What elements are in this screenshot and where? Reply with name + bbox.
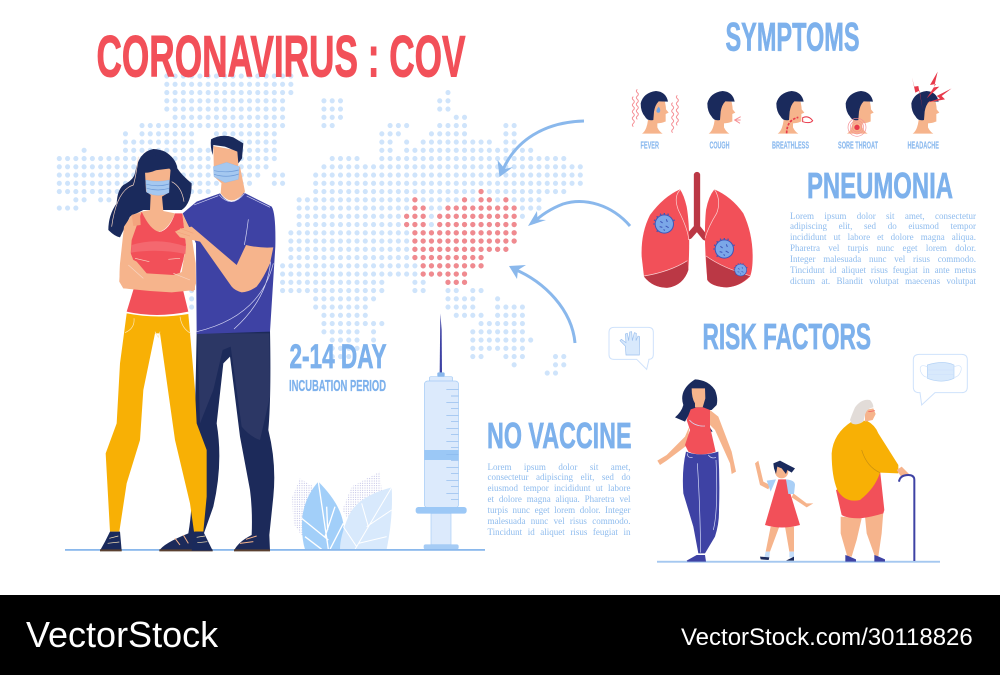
lungs illustration (642, 175, 753, 288)
icon: cough (707, 91, 741, 134)
text block: no vaccine: Lorem ipsum dolor sit amet, (488, 462, 630, 472)
text block: pneumonia: Tincidunt id aliquet risus feugiat in ante metus (790, 265, 976, 275)
symptom labels: HEADACHE (908, 140, 939, 152)
dotted world map (59, 76, 580, 373)
icon: breathless (776, 91, 813, 134)
watermark band (0, 595, 1000, 675)
figure: pregnant woman (657, 379, 736, 562)
couple in masks (100, 136, 275, 551)
syringe (416, 313, 467, 549)
text block: no vaccine (488, 462, 630, 537)
figure: grandmother (832, 400, 914, 562)
speech bubbles (609, 327, 967, 405)
text block: pneumonia: Pharetra vel turpis nunc eget lorem dolor. (790, 243, 976, 253)
title: CORONAVIRUS : COV (96, 24, 466, 90)
icon: sore throat (846, 91, 874, 136)
text block: no vaccine: et dolore magna aliqua. Pharetra vel (488, 494, 630, 504)
heading: no vaccine: NO VACCINE (487, 415, 632, 456)
heading: symptoms: SYMPTOMS (726, 16, 860, 60)
outbreak region dots (407, 192, 514, 282)
watermark logo: VectorStock (26, 614, 218, 654)
symptom labels: BREATHLESS (772, 140, 809, 152)
arrow: top (498, 121, 584, 177)
plants (292, 472, 392, 549)
heading: 2-14 day: 2-14 DAY (290, 338, 387, 376)
icon: headache (911, 72, 952, 134)
text block: no vaccine: consectetur adipiscing elit, sed do (488, 472, 630, 482)
text block: pneumonia: adipiscing elit, sed do eiusmod tempor (790, 221, 976, 231)
symptom labels: COUGH (710, 140, 730, 152)
text block: pneumonia: Integer malesuada nunc vel risus commodo. (790, 254, 976, 264)
incubation period label: INCUBATION PERIOD (289, 378, 386, 395)
risk group figures (657, 379, 914, 562)
ground line: couple (65, 549, 485, 551)
text block: no vaccine: eiusmod tempor incididunt ut labore (488, 483, 630, 493)
symptom labels: SORE THROAT (838, 140, 878, 152)
text block: no vaccine: malesuada nunc vel risus commodo. (488, 516, 630, 526)
bubble: mask (913, 354, 967, 405)
heading: risk factors: RISK FACTORS (702, 316, 871, 357)
symptom labels (640, 140, 939, 152)
figure: man arm (175, 227, 273, 292)
bubble: glove (609, 327, 653, 369)
watermark url: VectorStock.com/30118826 (681, 624, 973, 651)
text block: no vaccine: turpis nunc eget lorem dolor. Integer (488, 505, 630, 515)
figure: woman upper body (108, 149, 196, 315)
text block: pneumonia: dictum at. Blandit volutpat maecenas volutpat (790, 276, 976, 286)
symptom labels: FEVER (640, 140, 659, 152)
figure: man upper body (183, 136, 275, 334)
ground line: risk factors (657, 561, 940, 563)
figure: man lower body (159, 330, 274, 551)
symptom icons (632, 72, 952, 136)
figure: woman lower body (100, 313, 213, 551)
icon: fever (632, 89, 678, 134)
text block: pneumonia: incididunt ut labore et dolore magna aliqua. (790, 232, 976, 242)
map land dots (59, 76, 580, 373)
arrow: bottom (509, 265, 575, 343)
arrow: middle (528, 202, 630, 226)
text block: no vaccine: Tincidunt id aliquet risus feugiat in (488, 527, 630, 537)
text block: pneumonia: Lorem ipsum dolor sit amet, consectetur (790, 210, 976, 220)
figure: girl (755, 461, 813, 561)
text block: pneumonia (790, 210, 976, 286)
